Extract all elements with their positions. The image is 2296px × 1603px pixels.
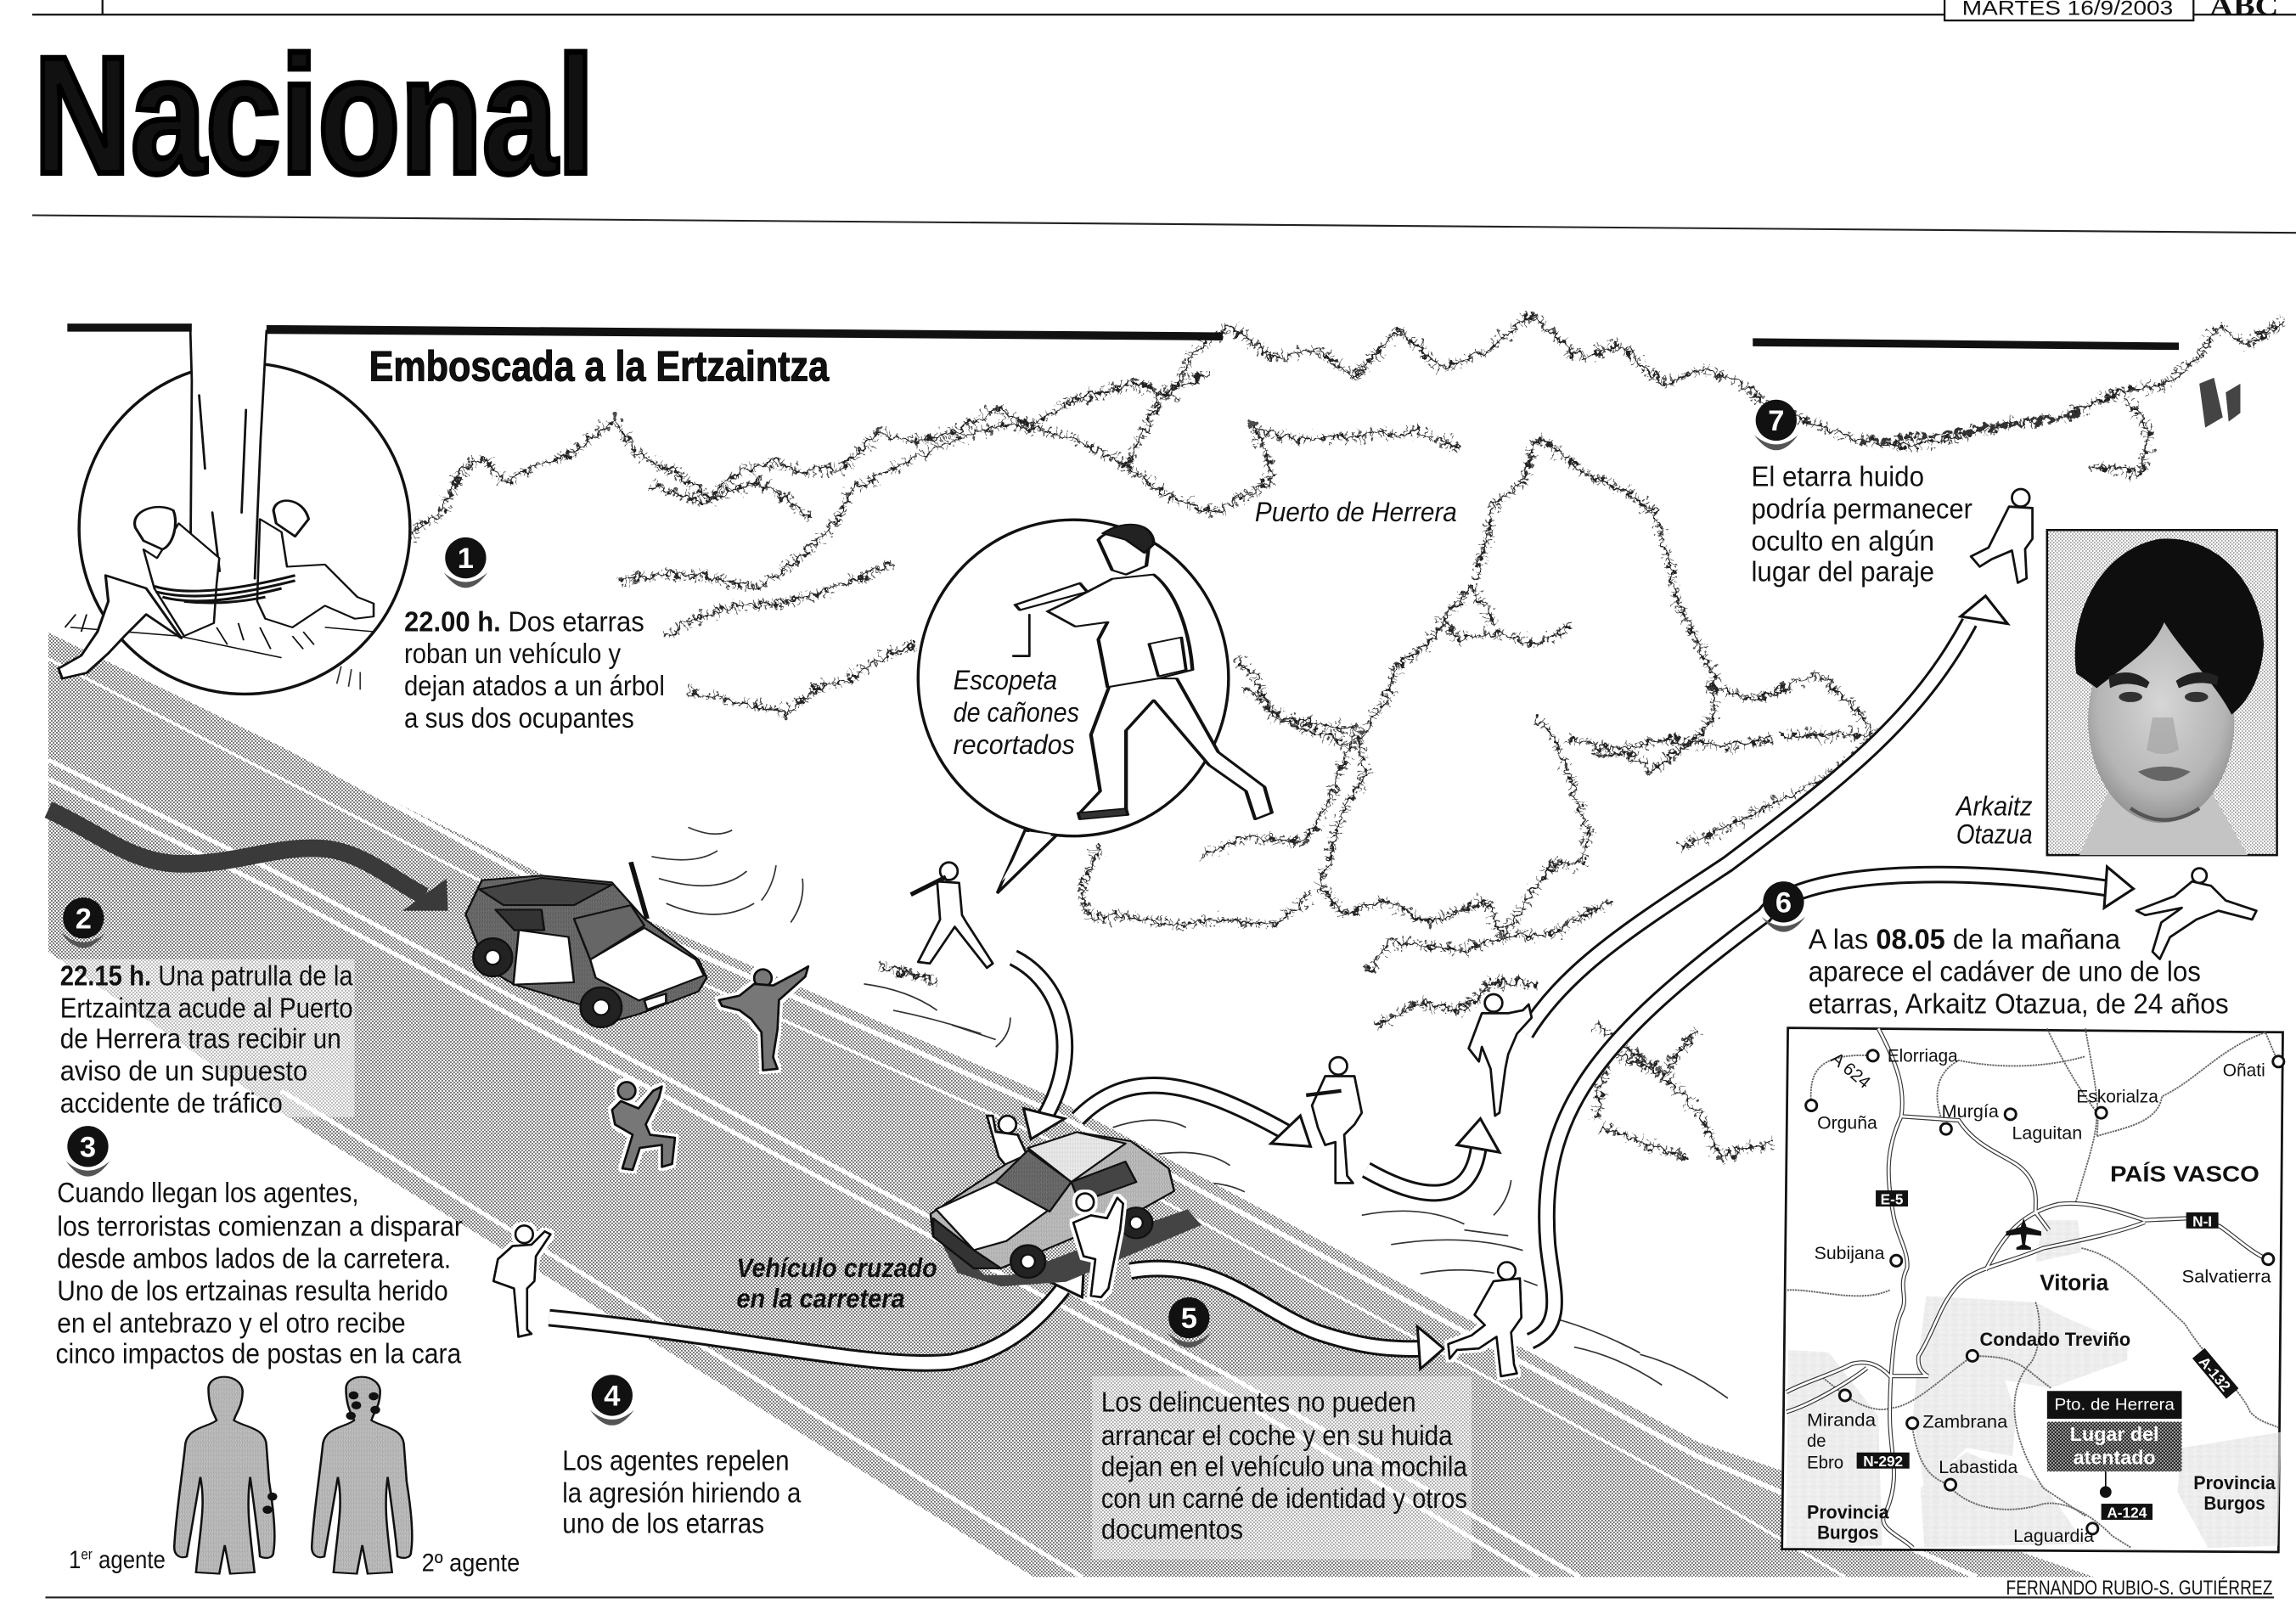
locator map: PAÍS VASCO [2110,1162,2259,1187]
locator map: Burgos [1817,1521,1879,1543]
agent behind car [987,1116,1028,1172]
step 6 text: aparece el cadáver de uno de los [1809,956,2201,987]
road labels: N-I [2192,1212,2212,1229]
minor roads [1787,1028,2279,1548]
road labels: E-5 [1881,1190,1904,1207]
agent silhouette near car [719,966,808,1071]
step 1 text: 22.00 h. Dos etarras [404,606,644,638]
arrow 3 [1366,1119,1500,1193]
bottom rule [45,1596,2274,1598]
locator map [1782,1028,2284,1552]
place names: Miranda [1807,1409,1876,1431]
step 1 text: dejan atados a un árbol [404,671,665,702]
crossed car [931,1132,1201,1286]
attack location tag: Pto. de Herrera [2054,1396,2175,1415]
step 2 badge: 2 [76,903,92,935]
step 7 badge [1754,400,1798,450]
step 6 text: A las 08.05 de la mañana [1809,924,2120,955]
locator map: Vitoria [2040,1271,2109,1295]
heading: Emboscada a la Ertzaintza [369,342,830,390]
arrow 2: car to roadside [1078,1085,1310,1146]
arrow 5 [1130,1268,1443,1369]
step 6 badge [1762,881,1805,932]
attack location tag: atentado [2074,1447,2156,1469]
runner at road edge [1449,1263,1522,1376]
shaded provinces [1787,1220,2281,1548]
road labels: A-132 [2196,1353,2234,1395]
rope [155,576,295,603]
step 3 text: desde ambos lados de la carretera. [57,1243,451,1274]
body diagrams: wounds of agents: 2º agente [422,1549,520,1577]
step 7 badge: 7 [1768,405,1784,437]
place names: Salvatierra [2181,1266,2271,1287]
step 6 text: etarras, Arkaitz Otazua, de 24 años [1809,988,2229,1020]
step 1 text [404,606,665,734]
place names: Orguña [1817,1112,1877,1133]
step 2 text: 22.15 h. Una patrulla de la [60,961,353,993]
first agent body [174,1377,278,1574]
step 5 text box: arrancar el coche y en su huida [1101,1420,1453,1452]
airport icon [2006,1218,2041,1250]
police car [465,862,706,1027]
photo caption: Arkaitz [1955,790,2033,822]
forest background [337,315,2284,1398]
step 5 text box: dejan en el vehículo una mochila [1101,1451,1467,1482]
place names: Laguardia [2013,1525,2094,1546]
step 5 text box: con un carné de identidad y otros [1101,1483,1467,1515]
step 2 text: aviso de un supuesto [60,1056,307,1088]
label: crossed vehicle [736,1252,937,1313]
small shooter [911,863,993,968]
step 5 text box: documentos [1101,1514,1243,1545]
step 4 text: uno de los etarras [562,1509,764,1540]
road labels [1857,1190,2238,1521]
road [48,633,2094,1577]
step 2 text [60,961,353,1120]
step 3 badge: 3 [80,1131,96,1163]
step 3 text: en el antebrazo y el otro recibe [57,1308,406,1339]
step 2 text background [59,959,354,1117]
step 6 badge: 6 [1775,886,1792,919]
step 1 text: a sus dos ocupantes [404,703,634,734]
speech bubble: shotgun man: de cañones [954,696,1079,728]
step 3 text: Uno de los ertzainas resulta herido [57,1275,448,1307]
step 2 text: Ertzaintza acude al Puerto [60,993,353,1025]
attack location tag [2047,1391,2181,1498]
step 4 badge: 4 [604,1381,620,1413]
step 7 text: El etarra huido [1751,462,1924,493]
locator map: Condado Treviño [1980,1329,2130,1350]
second agent body [312,1377,412,1574]
place names: Murgía [1942,1100,1999,1122]
step 7 text: oculto en algún [1751,526,1934,557]
step 7 text: lugar del paraje [1751,557,1934,588]
arrow 4: agents reply [549,1271,1083,1363]
step 3 text: cinco impactos de postas en la cara [56,1339,461,1370]
step 4 badge [590,1375,634,1426]
step 3 text: los terroristas comienzan a disparar [57,1211,463,1242]
page header strip [32,0,2296,21]
title bars [67,323,2179,350]
body diagrams: wounds of agents: agente [93,1546,166,1574]
label: crossed vehicle: Vehículo cruzado [736,1252,937,1283]
step 4 text: Los agentes repelen [562,1445,790,1476]
dark arrow: patrol route [48,810,448,911]
portrait photo [2047,530,2277,855]
body diagrams: wounds of agents [69,1377,520,1577]
step 6 text [1809,924,2229,1020]
place names: Oñati [2223,1060,2265,1081]
agent silhouette on the road [612,1082,675,1170]
step 3 text [56,1178,463,1370]
place names: Elorriaga [1888,1044,1958,1066]
photo caption [1955,790,2033,849]
step 5 badge: 5 [1181,1302,1197,1335]
step 7 text: podría permanecer [1751,493,1972,525]
man on the right [257,519,374,627]
running figure [1469,994,1532,1116]
step 4 text [562,1445,802,1540]
step 3 badge [66,1126,110,1177]
step 2 text: accidente de tráfico [60,1088,283,1120]
arrow 6: route to the cadaver [1530,867,2134,1341]
step 2 badge [61,897,105,948]
locator map: Provincia [2193,1472,2276,1493]
place names: Labastida [1939,1456,2017,1477]
fleeing figure with gun [1306,1057,1362,1183]
speech bubble: shotgun man [918,520,1272,893]
step 7 text [1751,462,1972,588]
step 5 text box [1092,1376,1472,1560]
speech bubble: shotgun man: Escopeta [954,664,1057,695]
dead body [2136,869,2256,959]
locator map: Provincia [1807,1501,1889,1522]
place names [1807,1044,2271,1546]
label: crossed vehicle: en la carretera [736,1283,905,1313]
fugitive runner [1971,489,2033,582]
body diagrams: wounds of agents: er [81,1546,93,1563]
road labels: N-292 [1863,1453,1903,1470]
step 5 badge [1167,1297,1211,1347]
man on the left [144,523,219,636]
place names: A 624 [1827,1049,1874,1093]
step 5 text box: Los delincuentes no pueden [1101,1386,1416,1418]
arrow 1: shooter to car [1013,958,1065,1139]
place names: de [1807,1430,1826,1451]
terrorist firing at road edge [493,1225,550,1336]
main roads [1787,1028,2270,1548]
locator map: Burgos [2203,1493,2265,1514]
step 1 badge: 1 [458,543,474,575]
arrow 7: route of the fugitive [1526,596,2007,1034]
photo caption: Otazua [1956,818,2033,849]
speech bubble: shotgun man: recortados [954,728,1075,760]
step 4 text: la agresión hiriendo a [562,1477,802,1509]
attack location tag: Lugar del [2070,1423,2159,1445]
section title: Nacional: Nacional [34,22,594,209]
place names: Subijana [1815,1242,1884,1263]
step 1 badge [444,537,487,588]
step 1 text: roban un vehículo y [404,638,621,670]
road labels: A-124 [2107,1504,2147,1521]
town markers [1806,1050,2284,1534]
step 2 text: de Herrera tras recibir un [60,1024,341,1055]
place names: Eskorialza [2076,1086,2158,1107]
place names: Laguitan [2012,1122,2082,1144]
inset circle: hostages tied to a tree [59,325,410,694]
body diagrams: wounds of agents: 1 [69,1546,82,1574]
place names: Ebro [1807,1452,1843,1473]
agent in front of car [1073,1193,1123,1297]
step 3 text: Cuando llegan los agentes, [57,1178,359,1209]
header rule [32,216,2296,233]
ground mound [65,615,374,658]
place names: Zambrana [1922,1410,2007,1431]
label: Puerto de Herrera: Puerto de Herrera [1255,496,1457,527]
shooter figure [1016,525,1272,819]
